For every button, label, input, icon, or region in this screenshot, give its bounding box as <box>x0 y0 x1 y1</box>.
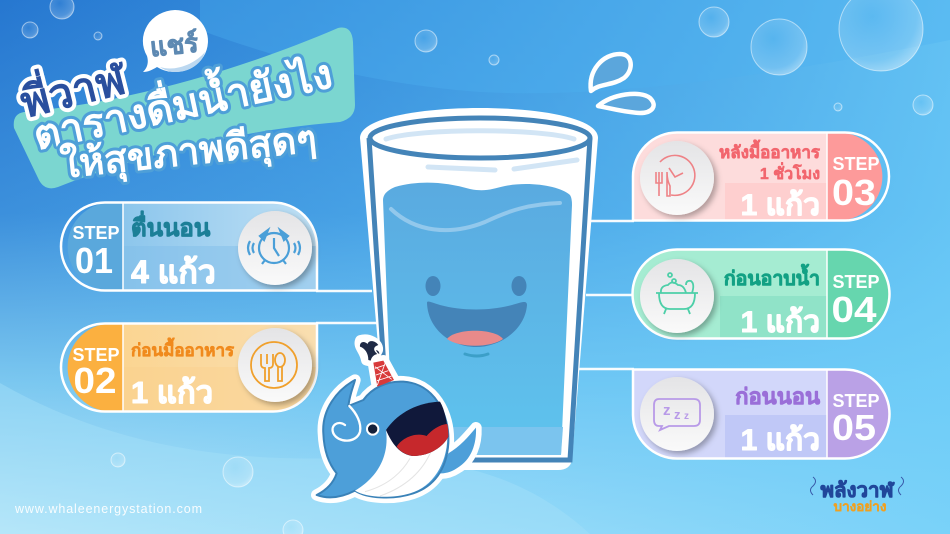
brand logo: พลังวาฬ <box>820 479 895 502</box>
connector lines <box>316 221 634 369</box>
step 04 card: 1 แก้ว <box>741 306 820 339</box>
eye <box>367 423 378 435</box>
body <box>317 380 448 497</box>
step 02 card: ก่อนมื้ออาหาร <box>131 337 235 360</box>
step 03 card: หลังมื้ออาหาร <box>719 139 821 162</box>
step 05 card: STEP <box>832 391 880 411</box>
right fin <box>440 428 476 473</box>
share speech bubble: แชร์ <box>148 28 200 62</box>
step 05 card: ก่อนนอน <box>735 384 820 409</box>
step 05 card <box>633 370 890 458</box>
icon: plate with fork and spoon <box>251 342 297 388</box>
share speech bubble <box>143 10 208 72</box>
step 03 card: 1 แก้ว <box>741 189 820 222</box>
step 03 card: 03 <box>832 172 876 213</box>
step 02 card: STEP <box>72 345 120 365</box>
mouth <box>386 402 448 456</box>
icon: sleep speech bubble: z <box>663 402 670 419</box>
water spout <box>360 341 379 361</box>
step 01 card: STEP <box>72 223 120 243</box>
step 02 card: 1 แก้ว <box>131 375 213 410</box>
icon: sleep speech bubble: z <box>674 407 681 422</box>
title text: พี่วาฬ <box>14 48 133 128</box>
icon: bathtub <box>656 273 698 314</box>
water <box>383 183 572 455</box>
step 01 card: ตื่นนอน <box>131 210 211 242</box>
step 04 card: 04 <box>832 289 876 330</box>
whale mascot <box>317 340 476 497</box>
oil tower <box>373 361 394 387</box>
step 01 card: 01 <box>75 240 113 281</box>
step 01 card <box>61 202 317 290</box>
brand logo <box>810 477 904 514</box>
title text: ตารางดื่มน้ำยังไง <box>28 44 336 159</box>
tail curl line <box>333 406 360 441</box>
step 05 card: 05 <box>832 407 876 448</box>
water splash drops <box>591 54 654 113</box>
face <box>426 276 527 356</box>
glass character <box>360 108 598 470</box>
brand logo: บางอย่าง <box>834 499 886 514</box>
whale white sticker outline <box>317 340 476 497</box>
step 02 card <box>61 324 317 412</box>
title banner <box>14 10 355 189</box>
icon: alarm clock <box>248 230 300 264</box>
step 04 card <box>632 250 890 339</box>
belly <box>355 430 447 497</box>
step 05 card: 1 แก้ว <box>741 424 820 457</box>
website url: www.whaleenergystation.com <box>14 502 202 516</box>
icon: sleep speech bubble: z <box>684 411 689 422</box>
icon: clock with fork and knife <box>656 155 695 196</box>
step 03 card: STEP <box>832 154 880 174</box>
step 01 card: 4 แก้ว <box>131 254 216 290</box>
step 04 card: STEP <box>832 272 880 292</box>
icon: sleep speech bubble <box>654 399 700 430</box>
step 03 card: 1 ชั่วโมง <box>760 162 820 183</box>
step 04 card: ก่อนอาบน้ำ <box>724 263 820 290</box>
step 02 card: 02 <box>74 360 116 401</box>
title text: ให้สุขภาพดีสุดๆ <box>58 116 319 189</box>
step 03 card <box>633 132 889 222</box>
